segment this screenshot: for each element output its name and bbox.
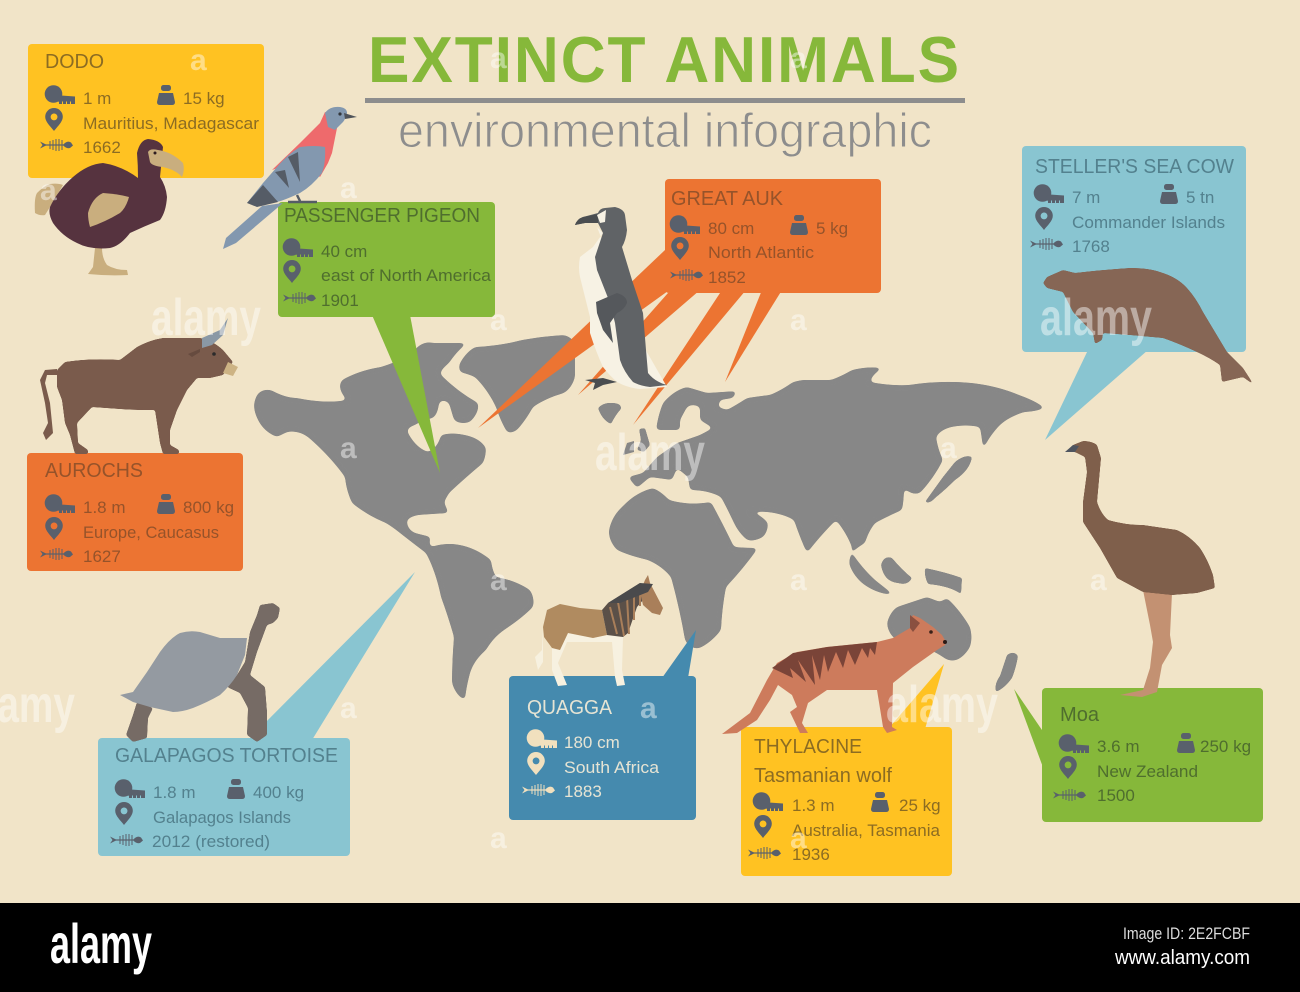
map: Eurasia [628,367,1045,595]
map: New Guinea [925,568,962,594]
footer band [0,903,1300,992]
panel: dodo: 15 kg [183,89,225,108]
panel: thylacine: THYLACINE [754,736,862,758]
panel: steller's sea cow: 7 m [1072,188,1100,207]
panel: moa: 250 kg [1200,737,1251,756]
watermarks [0,42,1152,855]
panel: steller's sea cow: STELLER'S SEA COW [1035,156,1234,178]
panel: moa: New Zealand [1097,762,1198,781]
panel: aurochs: Europe, Caucasus [83,523,219,542]
panel: quagga: QUAGGA [527,697,613,719]
pointer: passenger pigeon [372,315,440,473]
panel: aurochs: 800 kg [183,498,234,517]
illustration: moa [1065,441,1215,697]
footer logo: alamy [50,912,152,975]
watermarks: a [790,564,807,597]
map: Ireland [623,441,634,455]
map: North and South America [254,342,534,700]
pointer: galapagos tortoise [248,572,415,740]
watermarks: a [940,432,957,465]
subtitle: environmental infographic [398,105,932,158]
pointer: moa [1014,689,1044,770]
panel: thylacine: Tasmanian wolf [754,765,892,787]
panel: thylacine: Australia, Tasmania [792,821,941,840]
panel: aurochs: 1627 [83,547,121,566]
illustration: thylacine [722,615,947,734]
watermarks: a [340,692,357,725]
panel: aurochs [27,453,243,571]
panel: dodo: 1 m [83,89,111,108]
panel: thylacine [741,727,952,876]
watermarks: a [490,822,507,855]
panel: great auk: 5 kg [816,219,848,238]
map: Greenland [459,335,575,433]
watermarks: alamy [151,289,261,347]
watermarks: alamy [595,424,705,482]
map: Japan [925,456,972,502]
panel: thylacine: 1.3 m [792,796,835,815]
panel: steller's sea cow: 5 tn [1186,188,1214,207]
panel: thylacine: 25 kg [899,796,941,815]
panel: dodo: DODO [45,51,104,73]
world map [254,335,1045,700]
pointer: great auk [478,250,782,428]
panel: galapagos tortoise [98,738,350,856]
panel: great auk: 1852 [708,268,746,287]
illustration: galapagos tortoise [120,603,280,742]
pointer: thylacine [888,664,944,729]
watermarks: a [790,304,807,337]
panel: galapagos tortoise: 1.8 m [153,783,196,802]
illustration: aurochs [40,318,238,454]
panel: dodo: Mauritius, Madagascar [83,114,259,133]
panel: quagga: South Africa [564,758,660,777]
panel: thylacine: 1936 [792,845,830,864]
map: Iceland [598,403,621,424]
map: Borneo [881,557,912,584]
panel: passenger pigeon: PASSENGER PIGEON [284,205,480,227]
footer url: www.alamy.com [1114,947,1250,969]
panel: galapagos tortoise: Galapagos Islands [153,808,291,827]
panel: dodo [28,44,264,178]
pointer: quagga [662,630,696,678]
watermarks: a [1090,564,1107,597]
watermarks: a [190,44,207,77]
watermarks: a [490,304,507,337]
panel: quagga: 180 cm [564,733,620,752]
panel: aurochs: 1.8 m [83,498,126,517]
panel: moa [1042,688,1263,822]
title rule [365,98,965,103]
watermarks: a [340,172,357,205]
watermarks: a [790,822,807,855]
panel: galapagos tortoise: 400 kg [253,783,304,802]
panel: quagga [509,676,696,820]
panel: dodo: 1662 [83,138,121,157]
panel: moa: 1500 [1097,786,1135,805]
panel: great auk: 80 cm [708,219,754,238]
panel: steller's sea cow: 1768 [1072,237,1110,256]
illustration: steller's sea cow [1043,268,1254,385]
panel: great auk: North Atlantic [708,243,815,262]
panel: moa: Moa [1060,704,1100,726]
panel: passenger pigeon: 40 cm [321,242,367,261]
watermarks: a [40,174,57,207]
watermarks: a [340,432,357,465]
panel: moa: 3.6 m [1097,737,1140,756]
panel: steller's sea cow: Commander Islands [1072,213,1225,232]
watermarks: a [790,42,807,75]
watermarks: alamy [1040,289,1152,347]
illustration: passenger pigeon [223,107,357,249]
watermarks: alamy [886,676,998,734]
panel: galapagos tortoise: 2012 (restored) [152,832,270,851]
panel: galapagos tortoise: GALAPAGOS TORTOISE [115,745,338,767]
illustration: great auk [575,207,667,390]
illustration: quagga [535,575,663,686]
map: Africa [609,488,758,648]
panel: passenger pigeon: east of North America [321,266,492,285]
panel: quagga: 1883 [564,782,602,801]
panel: steller's sea cow [1022,146,1246,352]
watermarks: a [490,564,507,597]
title: EXTINCT ANIMALS [368,23,961,96]
pointer: steller's sea cow [1045,350,1148,440]
watermarks: a [490,42,507,75]
panel: great auk [665,179,881,293]
watermarks: a [640,692,657,725]
footer image id: Image ID: 2E2FCBF [1123,924,1250,943]
panel: aurochs: AUROCHS [45,460,143,482]
panel: passenger pigeon: 1901 [321,291,359,310]
panel: passenger pigeon [278,202,495,317]
map: Australia [887,597,972,661]
panel: great auk: GREAT AUK [671,188,784,210]
map: Britain [637,428,650,452]
map: New Zealand [996,653,1018,692]
illustration: dodo [35,139,184,275]
